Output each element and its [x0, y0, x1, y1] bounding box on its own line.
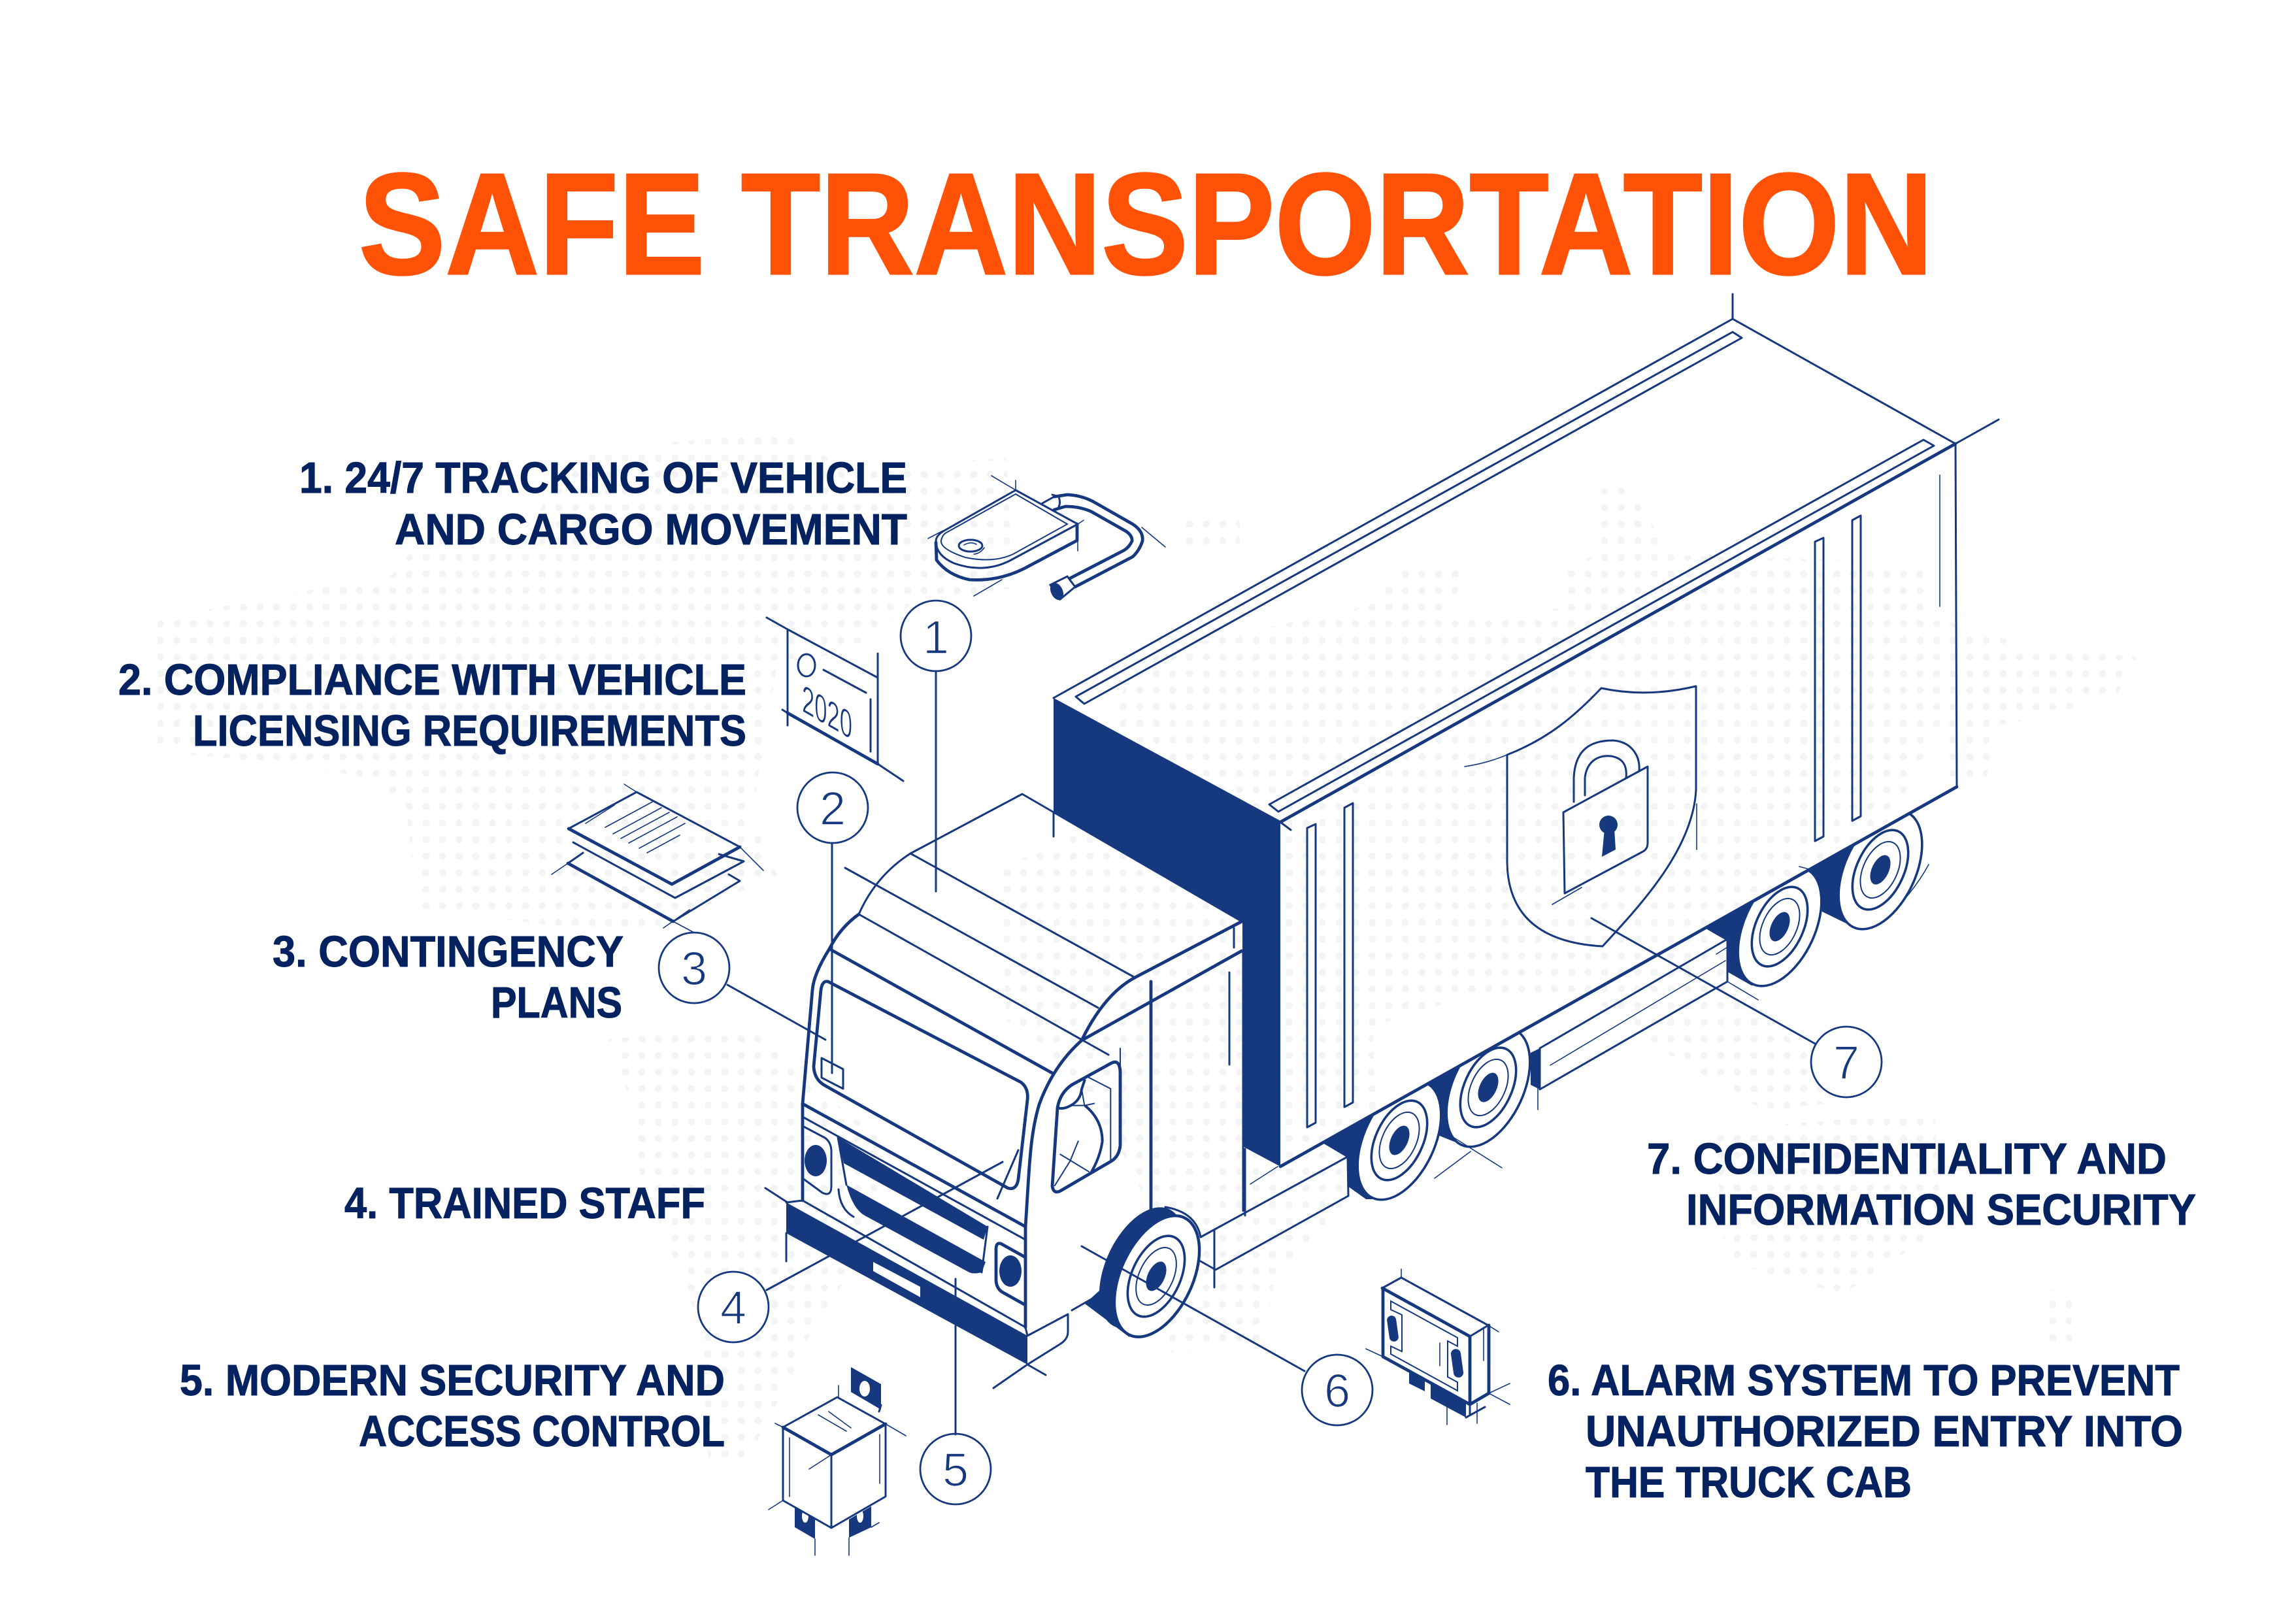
- callout 6: 6: [1324, 1365, 1350, 1417]
- trailer roof rails: [1076, 332, 1934, 812]
- label 3: 3. CONTINGENCY: [273, 927, 624, 976]
- icon: seal padlock: [928, 476, 1165, 602]
- callout 1: [901, 601, 971, 891]
- label 1: AND CARGO MOVEMENT: [395, 505, 907, 554]
- trailer front dark face: [1054, 698, 1280, 1167]
- cab rear verticals: [1150, 982, 1152, 1209]
- illustration: trailer: [1054, 294, 1999, 1287]
- wheel 3: [1447, 1033, 1531, 1148]
- wheel 2: [1739, 870, 1822, 987]
- label 6: THE TRUCK CAB: [1586, 1458, 1912, 1507]
- callout 3: 3: [681, 943, 707, 995]
- label 5: [180, 1356, 725, 1456]
- chassis beam mid: [1201, 1142, 1348, 1287]
- callout 1: 1: [923, 612, 949, 664]
- callout 6: [1082, 1246, 1373, 1425]
- label 1: 1. 24/7 TRACKING OF VEHICLE: [299, 454, 907, 503]
- callout 5: 5: [942, 1444, 969, 1497]
- rear wheels: [1323, 797, 1939, 1213]
- title: SAFE TRANSPORTATION: [359, 143, 1933, 305]
- cab roof lines: [845, 853, 1134, 1055]
- label 7: [1647, 1134, 2196, 1234]
- bumper: [786, 1202, 1027, 1365]
- icon: alarm box: [1366, 1269, 1510, 1425]
- chassis beam rear: [1540, 939, 1727, 1089]
- trailer lower edge: [1280, 787, 1957, 1167]
- side window with driver: [1052, 1048, 1120, 1192]
- shield with padlock: [1465, 686, 1697, 946]
- icon: licence plate 2020: [767, 618, 903, 781]
- callout 7: [1591, 918, 1882, 1097]
- label 2: 2. COMPLIANCE WITH VEHICLE: [118, 655, 746, 704]
- headlights: [803, 1126, 831, 1194]
- label 3: [273, 927, 624, 1027]
- grille bands: [803, 1104, 1025, 1227]
- callout 2: 2: [820, 783, 846, 835]
- callout 4: [698, 1162, 1003, 1342]
- label 3: PLANS: [491, 978, 622, 1027]
- label 6: UNAUTHORIZED ENTRY INTO: [1586, 1407, 2183, 1456]
- callout 4: 4: [720, 1282, 746, 1334]
- windshield: [814, 982, 1027, 1189]
- callout 5: [920, 1279, 991, 1504]
- label 6: [1548, 1356, 2183, 1507]
- callout 7: 7: [1833, 1037, 1859, 1089]
- label 6: 6. ALARM SYSTEM TO PREVENT: [1548, 1356, 2180, 1405]
- front wheel: [1072, 1194, 1217, 1350]
- background: dotted world map: [158, 431, 2137, 1464]
- illustration: truck cab: [765, 794, 1243, 1388]
- label 5: ACCESS CONTROL: [359, 1407, 725, 1456]
- trailer outline: [1054, 319, 1957, 787]
- icon: licence plate 2020: 2020: [802, 676, 852, 749]
- wheel 1: [1839, 814, 1923, 931]
- callout 2: [797, 772, 868, 1073]
- label 5: 5. MODERN SECURITY AND: [180, 1356, 725, 1405]
- label 2: LICENSING REQUIREMENTS: [193, 706, 746, 755]
- label 2: [118, 655, 746, 755]
- icon: relay module: [769, 1367, 906, 1555]
- label 7: 7. CONFIDENTIALITY AND: [1647, 1134, 2167, 1183]
- callout 3: [659, 933, 825, 1040]
- label 1: [299, 454, 907, 554]
- icon: stacked documents: [552, 784, 763, 932]
- wheel 4: [1358, 1085, 1440, 1201]
- label 7: INFORMATION SECURITY: [1686, 1185, 2196, 1234]
- trailer side ribs: [1307, 516, 1861, 1127]
- label 4: 4. TRAINED STAFF: [344, 1179, 705, 1228]
- cab outline: [1025, 921, 1242, 1327]
